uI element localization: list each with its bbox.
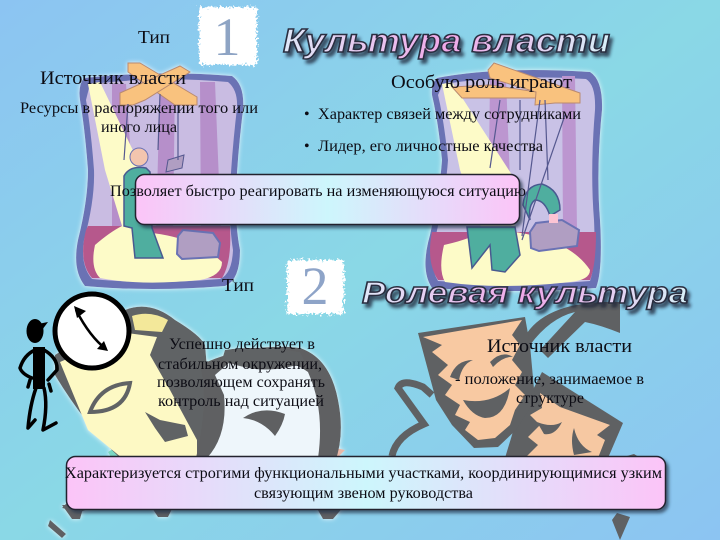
text block: source of power 1: Ресурсы в распоряжении того или — [20, 100, 258, 117]
title: role culture: Ролевая культура — [362, 275, 688, 310]
number tile 1 — [199, 7, 257, 67]
callout: functional areas: Характеризуется строгими функциональными участками, координирующимися узким — [65, 465, 662, 482]
illustration: comedy and tragedy masks — [392, 302, 644, 540]
text block: source of power 1: иного лица — [101, 119, 177, 136]
callout: quick reaction: Позволяет быстро реагировать на изменяющуюся ситуацию — [110, 183, 526, 200]
text block: source of power 1 — [20, 68, 258, 136]
title: power culture: Культура власти — [283, 22, 610, 59]
label: type 1: Тип — [138, 27, 170, 47]
text block: stable environment: Успешно действует в — [169, 336, 315, 353]
number tile 2 — [287, 256, 344, 316]
text block: special role: Особую роль играют — [391, 72, 573, 93]
text block: source of power 2: Источник власти — [487, 336, 632, 357]
callout: quick reaction — [110, 174, 526, 224]
text block: stable environment: стабильном окружении, — [158, 356, 322, 373]
illustration: puppet theatre left — [76, 63, 243, 289]
text block: stable environment: контроль над ситуацией — [158, 393, 324, 410]
callout: functional areas — [65, 456, 666, 510]
label: type 2: Тип — [222, 275, 254, 295]
illustration: puppet theatre right — [425, 63, 602, 291]
icon: stick figure — [20, 319, 57, 430]
callout: functional areas: связующим звеном руководства — [254, 485, 473, 502]
text block: special role: • — [304, 138, 310, 155]
text block: stable environment — [157, 336, 325, 410]
text block: stable environment: позволяющем сохранять — [157, 374, 325, 391]
illustration: two sleeping masks — [48, 307, 345, 538]
text block: source of power 1: Источник власти — [40, 68, 186, 89]
text block: source of power 2: структуре — [516, 390, 584, 407]
text block: special role: • — [304, 106, 310, 123]
text block: special role: Лидер, его личностные качества — [318, 138, 543, 155]
number tile 2: 2 — [302, 256, 328, 316]
text block: source of power 2 — [455, 336, 644, 407]
number tile 1: 1 — [214, 7, 240, 67]
text block: source of power 2: - положение, занимаемое в — [455, 371, 644, 388]
text block: special role — [304, 72, 581, 155]
icon: clock — [55, 294, 129, 368]
text block: special role: Характер связей между сотрудниками — [318, 106, 581, 123]
